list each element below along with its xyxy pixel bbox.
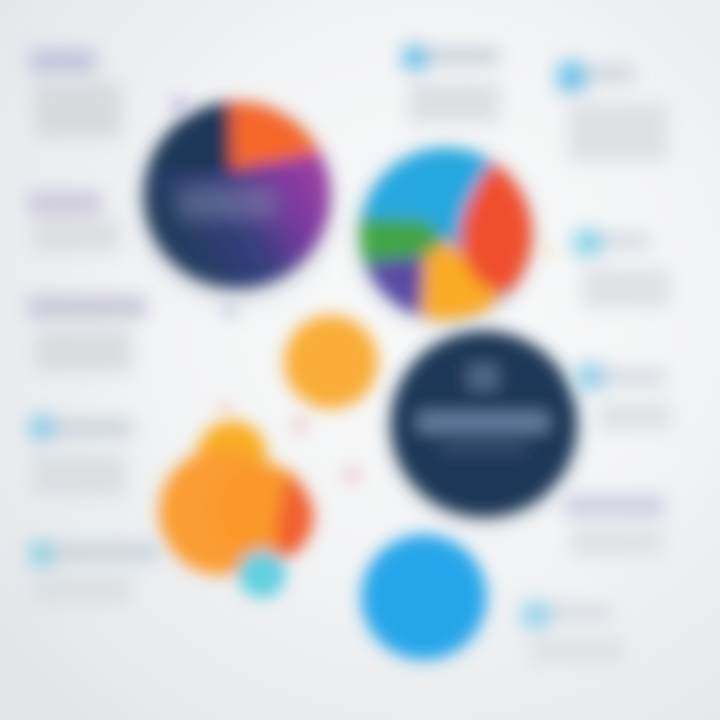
- panel: dark circle with label: [391, 331, 577, 520]
- panel: dark pie chart: [140, 95, 335, 300]
- text block: left 1: [30, 50, 122, 138]
- panel: colourful pie chart: [335, 148, 540, 335]
- text block: top middle: [403, 46, 500, 124]
- connector dots: [170, 95, 555, 485]
- panel: orange circle: [284, 315, 378, 409]
- text block: left 2: [28, 192, 120, 252]
- text block: right 5: [522, 602, 624, 664]
- text block: left 5: [30, 542, 160, 604]
- text block: top right: [558, 62, 668, 162]
- panel: orange blob: [159, 421, 314, 598]
- text block: right 3: [576, 364, 672, 430]
- text block: left 3: [28, 296, 146, 372]
- text block: right 2: [574, 230, 670, 308]
- panel: blue circle: [362, 535, 486, 662]
- text block: right 4: [564, 496, 664, 556]
- text block: left 4: [30, 416, 132, 496]
